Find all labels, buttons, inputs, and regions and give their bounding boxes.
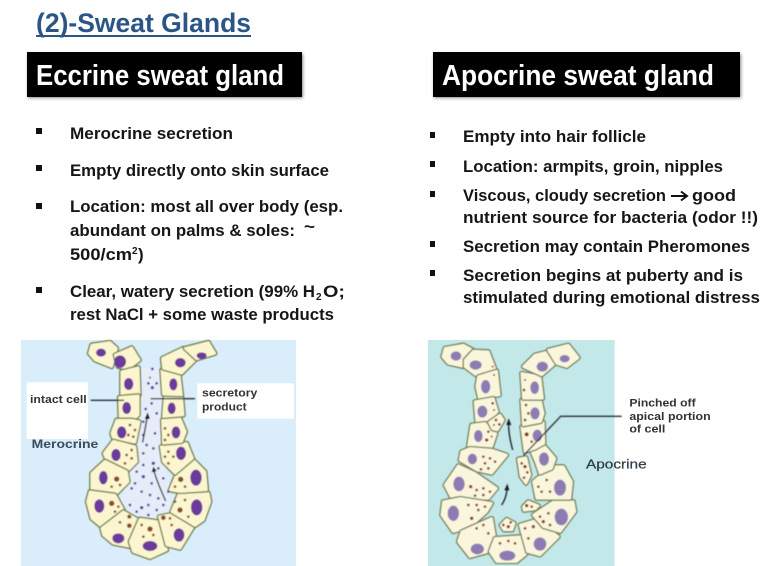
text block: eccrine bullet list: ) xyxy=(138,245,144,264)
labels: apical portion xyxy=(629,411,711,423)
labels: Apocrine xyxy=(586,458,647,472)
labels: secretory xyxy=(202,387,258,399)
text block: apocrine bullet list: nutrient source for bacteria (odor !!) xyxy=(463,208,758,227)
text block: eccrine bullet list: Empty directly onto skin surface xyxy=(70,161,329,180)
text block: apocrine bullet list xyxy=(430,127,760,307)
labels xyxy=(30,387,258,451)
text block: apocrine bullet list: stimulated during emotional distress xyxy=(463,288,760,307)
nuclei xyxy=(448,351,570,561)
heading: apocrine sweat gland xyxy=(433,52,741,98)
text block: eccrine bullet list: abundant on palms & soles: xyxy=(70,221,295,240)
text block: apocrine bullet list: Empty into hair follicle xyxy=(463,127,646,146)
labels xyxy=(586,397,711,472)
text block: apocrine bullet list: Secretion may contain Pheromones xyxy=(463,237,750,256)
cells xyxy=(442,345,578,562)
arrows xyxy=(143,417,147,442)
title: (2)-Sweat Glands xyxy=(36,8,251,38)
heading: eccrine sweat gland xyxy=(27,52,303,98)
text block: apocrine bullet list: Location: armpits, groin, nipples xyxy=(463,157,723,176)
diagram: apocrine gland xyxy=(428,340,711,566)
heading: eccrine sweat gland: Eccrine sweat gland xyxy=(36,60,284,92)
secretory cells xyxy=(87,342,215,558)
pinched-off portions xyxy=(489,415,503,430)
secretion dots xyxy=(129,368,170,516)
text block: apocrine bullet list: Viscous, cloudy secretion xyxy=(463,186,666,205)
text block: eccrine bullet list: Merocrine secretion xyxy=(70,124,233,143)
labels: Pinched off xyxy=(629,397,696,409)
labels: Merocrine xyxy=(32,437,99,451)
text block: apocrine bullet list: Secretion begins at puberty and is xyxy=(463,266,743,285)
lumen xyxy=(122,368,172,518)
text block: eccrine bullet list: 2 xyxy=(132,246,138,257)
heading: apocrine sweat gland: Apocrine sweat gland xyxy=(442,60,714,92)
text block: eccrine bullet list: 500/cm xyxy=(70,245,132,264)
nuclei xyxy=(94,349,207,551)
text block: eccrine bullet list: rest NaCl + some waste products xyxy=(70,305,334,324)
labels: product xyxy=(202,401,247,413)
text block: eccrine bullet list: 2 xyxy=(316,292,322,303)
labels: of cell xyxy=(629,424,665,436)
text block: eccrine bullet list: Location: most all over body (esp. xyxy=(70,197,343,216)
leader lines xyxy=(91,399,195,400)
granules xyxy=(109,424,190,538)
arrows xyxy=(509,423,513,450)
text block: eccrine bullet list: ~ xyxy=(304,217,315,236)
text block: eccrine bullet list: O; xyxy=(323,282,345,301)
granules xyxy=(467,366,551,545)
diagram: merocrine gland xyxy=(21,340,296,566)
text block: eccrine bullet list: Clear, watery secretion (99% H xyxy=(70,282,315,301)
text block: apocrine bullet list: good xyxy=(692,186,736,205)
labels: intact cell xyxy=(30,394,87,406)
text block: eccrine bullet list xyxy=(36,124,345,324)
leader line xyxy=(523,416,622,456)
